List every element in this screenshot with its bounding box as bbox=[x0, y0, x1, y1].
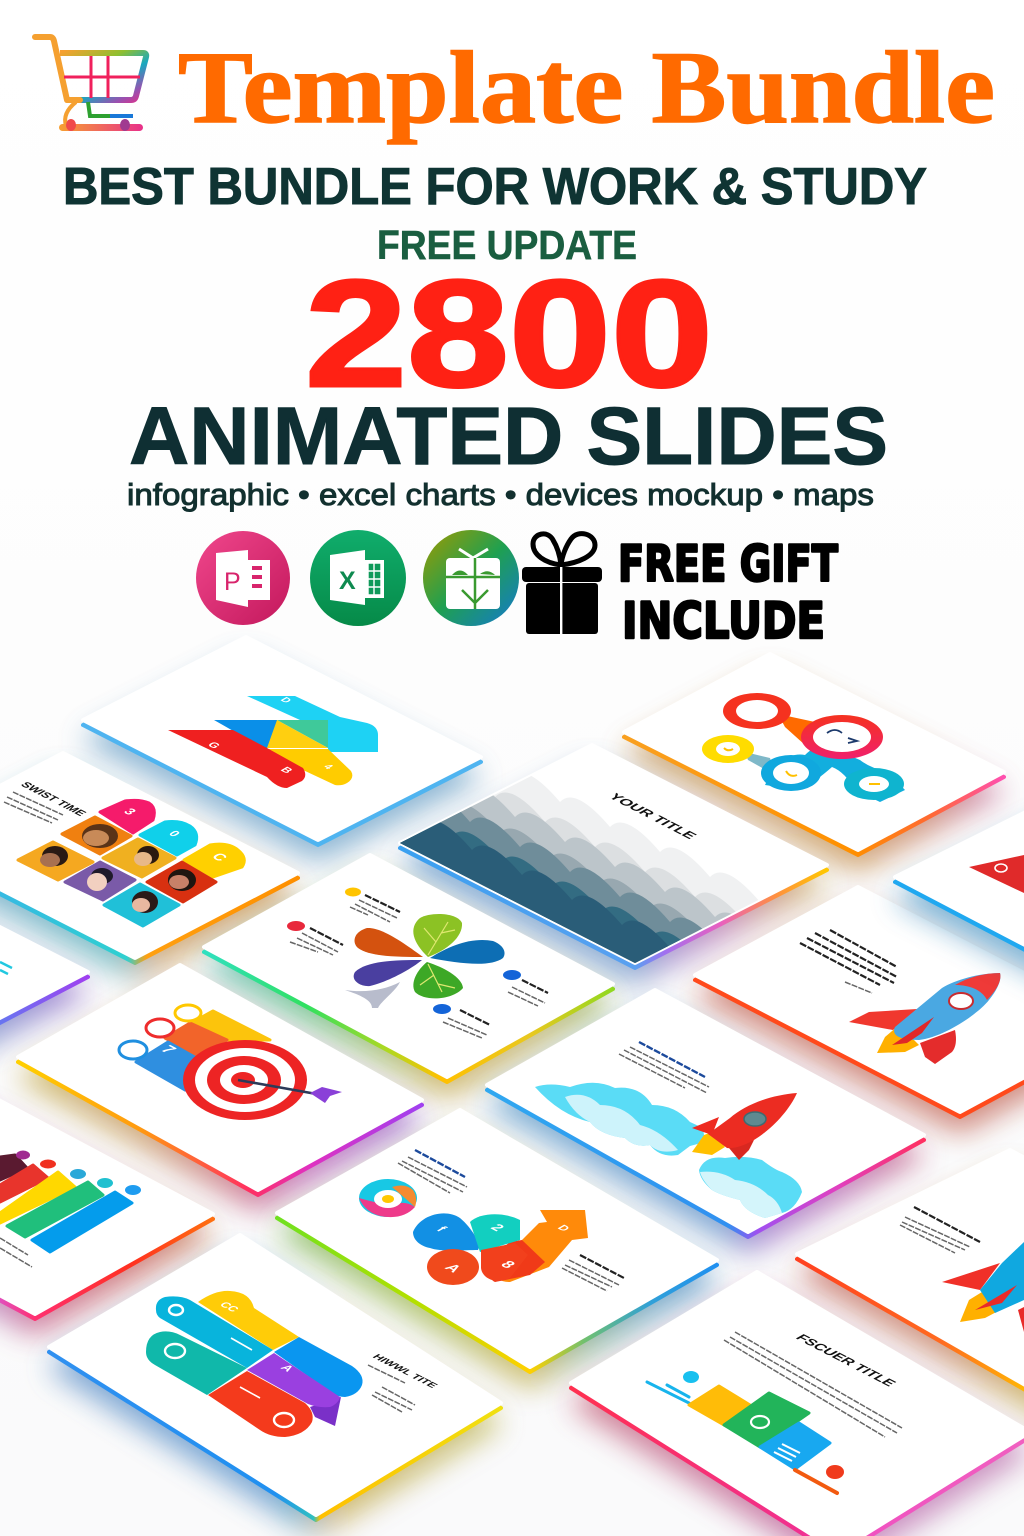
slide: partial left bbox=[0, 852, 88, 1077]
slide: petals and arrow: A bbox=[441, 1262, 465, 1275]
slide: team portraits: C bbox=[208, 851, 231, 863]
slide: folded arrows: B bbox=[277, 766, 295, 775]
slide: folded arrows: 4 bbox=[320, 763, 335, 771]
heading: best bundle: BEST BUNDLE FOR WORK & STUDY bbox=[63, 158, 927, 216]
slide: team portraits bbox=[0, 753, 298, 978]
slide: stacked bars bbox=[0, 1089, 213, 1334]
slide: stepped blocks bbox=[571, 1272, 1024, 1536]
slide: target: 7 bbox=[157, 1044, 179, 1056]
slide: petals and arrow: 8 bbox=[497, 1259, 519, 1271]
slide: target bbox=[18, 965, 422, 1210]
slide: connected circles bbox=[624, 654, 1004, 870]
slide: rocket cropped bbox=[797, 1150, 1024, 1425]
icon: excel bbox=[310, 530, 406, 626]
slide: team portraits: 0 bbox=[165, 829, 184, 839]
slide: cloud layers bbox=[388, 750, 838, 999]
slide: folded arrows: G bbox=[204, 741, 222, 750]
slide: team portraits: 3 bbox=[120, 806, 140, 817]
slide: petals and arrow: D bbox=[554, 1224, 572, 1233]
icon: powerpoint: P bbox=[224, 568, 241, 596]
slide: rocket and clouds bbox=[487, 990, 924, 1252]
slide: ribbons: HIWWL TITE bbox=[369, 1353, 440, 1390]
slide: petals and arrow: f bbox=[433, 1224, 451, 1234]
slide: team portraits: SWIST TIME bbox=[17, 781, 88, 818]
label: include: INCLUDE bbox=[622, 592, 825, 650]
slide: partial top right bbox=[895, 800, 1024, 1020]
title: Template Bundle bbox=[178, 31, 995, 145]
icon: shopping cart bbox=[35, 37, 146, 131]
icon: powerpoint bbox=[196, 531, 290, 625]
slide: leaf diagram bbox=[204, 855, 613, 1097]
icon: excel: X bbox=[339, 567, 356, 595]
heading: animated slides: ANIMATED SLIDES bbox=[129, 391, 888, 482]
slide: folded arrows: D bbox=[277, 696, 293, 705]
slide: folded arrows bbox=[83, 637, 481, 860]
slide: petals and arrow bbox=[277, 1110, 717, 1387]
heading: free update: FREE UPDATE bbox=[377, 222, 637, 268]
subheading: feature list: infographic • excel charts • devices mockup • maps bbox=[127, 477, 874, 512]
slide: ribbons: CC bbox=[216, 1301, 241, 1314]
label: free gift: FREE GIFT bbox=[618, 535, 838, 593]
slide: petals and arrow: 2 bbox=[487, 1222, 508, 1233]
slide: stepped blocks: FSCUER TITLE bbox=[792, 1332, 900, 1388]
slide: ribbons: A bbox=[277, 1363, 298, 1374]
slide: cloud layers: YOUR TITLE bbox=[605, 791, 701, 841]
icon: gift box bbox=[522, 534, 602, 634]
icon: gift app bbox=[423, 530, 519, 626]
slide: ribbons bbox=[49, 1235, 501, 1535]
slide: rocket with text bbox=[695, 887, 1024, 1132]
number: 2800: 2800 bbox=[305, 249, 713, 419]
